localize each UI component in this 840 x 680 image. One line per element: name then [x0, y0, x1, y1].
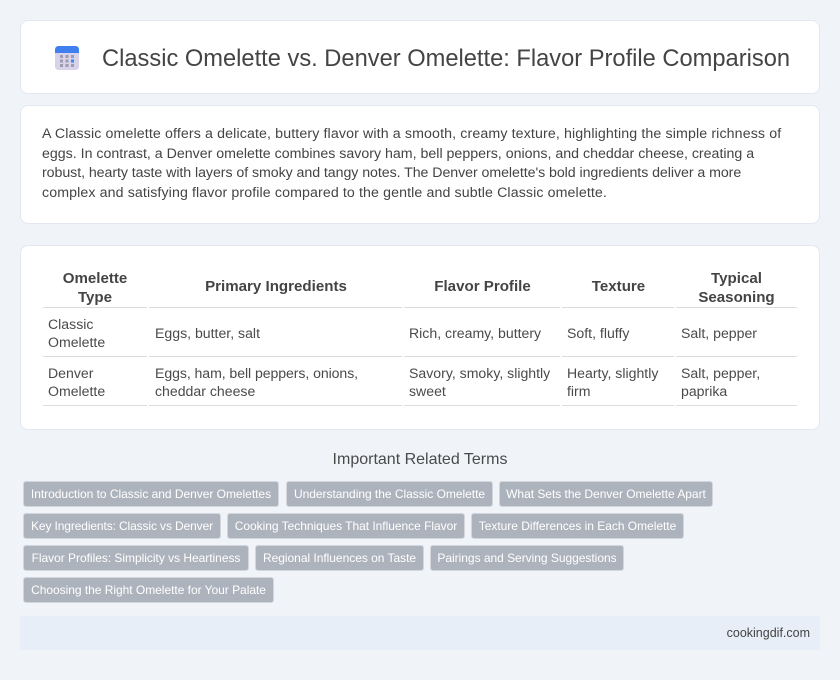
- table headers: Flavor Profile: [434, 278, 531, 295]
- intro paragraph: [42, 126, 782, 200]
- row: Classic Omelette: Eggs, butter, salt: [155, 325, 260, 341]
- row: Denver Omelette: cheddar cheese: [155, 383, 255, 399]
- row: Classic Omelette: Rich, creamy, buttery: [409, 325, 541, 341]
- row: Denver Omelette: Omelette: [48, 383, 105, 399]
- related term tags: Introduction to Classic and Denver Omelettes: [31, 487, 271, 501]
- related term tags: What Sets the Denver Omelette Apart: [506, 487, 706, 501]
- table headers: [63, 270, 775, 306]
- row: Denver Omelette: Savory, smoky, slightly: [409, 365, 550, 381]
- header panel: [20, 20, 820, 94]
- row: Denver Omelette: Salt, pepper,: [681, 365, 760, 381]
- intro paragraph: A Classic omelette offers a delicate, buttery flavor with a smooth, creamy texture, highlighting the simple richness of: [42, 126, 781, 142]
- related term tags: Understanding the Classic Omelette: [294, 487, 485, 501]
- title: Classic Omelette vs. Denver Omelette: Flavor Profile Comparison: [102, 46, 790, 72]
- row: Denver Omelette: [48, 365, 760, 399]
- row: Classic Omelette: Omelette: [48, 334, 105, 350]
- table headers: Omelette: [63, 270, 127, 287]
- row: Denver Omelette: paprika: [681, 383, 727, 399]
- related term tags: Pairings and Serving Suggestions: [437, 551, 617, 565]
- intro paragraph: complex and satisfying flavor profile compared to the gentle and subtle Classic omelette.: [42, 184, 607, 200]
- row: Denver Omelette: Eggs, ham, bell peppers, onions,: [155, 365, 358, 381]
- table headers: Type: [78, 289, 112, 306]
- table headers: Primary Ingredients: [205, 278, 347, 295]
- related term tags: Choosing the Right Omelette for Your Palate: [31, 583, 266, 597]
- row: Denver Omelette: Denver: [48, 365, 93, 381]
- table headers: Texture: [592, 278, 645, 295]
- table headers: Seasoning: [698, 289, 775, 306]
- row: Classic Omelette: Soft, fluffy: [567, 325, 629, 341]
- related term tags: Texture Differences in Each Omelette: [479, 519, 676, 533]
- footer source text: cookingdif.com: [727, 626, 810, 640]
- panel: introduction text: [20, 105, 820, 224]
- icon: calendar: [55, 46, 79, 70]
- row: Classic Omelette: Salt, pepper: [681, 325, 757, 341]
- row: Denver Omelette: sweet: [409, 383, 446, 399]
- row: Denver Omelette: firm: [567, 383, 590, 399]
- panel: comparison table: [20, 245, 820, 430]
- intro paragraph: robust, hearty taste with layers of smoky and tangy notes. The Denver omelette's bold ingredients deliver a more: [42, 165, 741, 181]
- intro paragraph: eggs. In contrast, a Denver omelette combines savory ham, bell peppers, onions, and cheddar cheese, creating a: [42, 146, 754, 162]
- row: Denver Omelette: Hearty, slightly: [567, 365, 658, 381]
- related term tags: Cooking Techniques That Influence Flavor: [235, 519, 457, 533]
- row: Classic Omelette: Classic: [48, 316, 93, 332]
- footer bar: [20, 616, 820, 650]
- heading: related terms: Important Related Terms: [333, 451, 507, 468]
- related term tags: [23, 481, 713, 603]
- related term tags: Regional Influences on Taste: [263, 551, 416, 565]
- table headers: Typical: [711, 270, 762, 287]
- related term tags: Key Ingredients: Classic vs Denver: [31, 519, 213, 533]
- related term tags: Flavor Profiles: Simplicity vs Heartiness: [32, 551, 240, 565]
- row: Classic Omelette: [48, 316, 757, 350]
